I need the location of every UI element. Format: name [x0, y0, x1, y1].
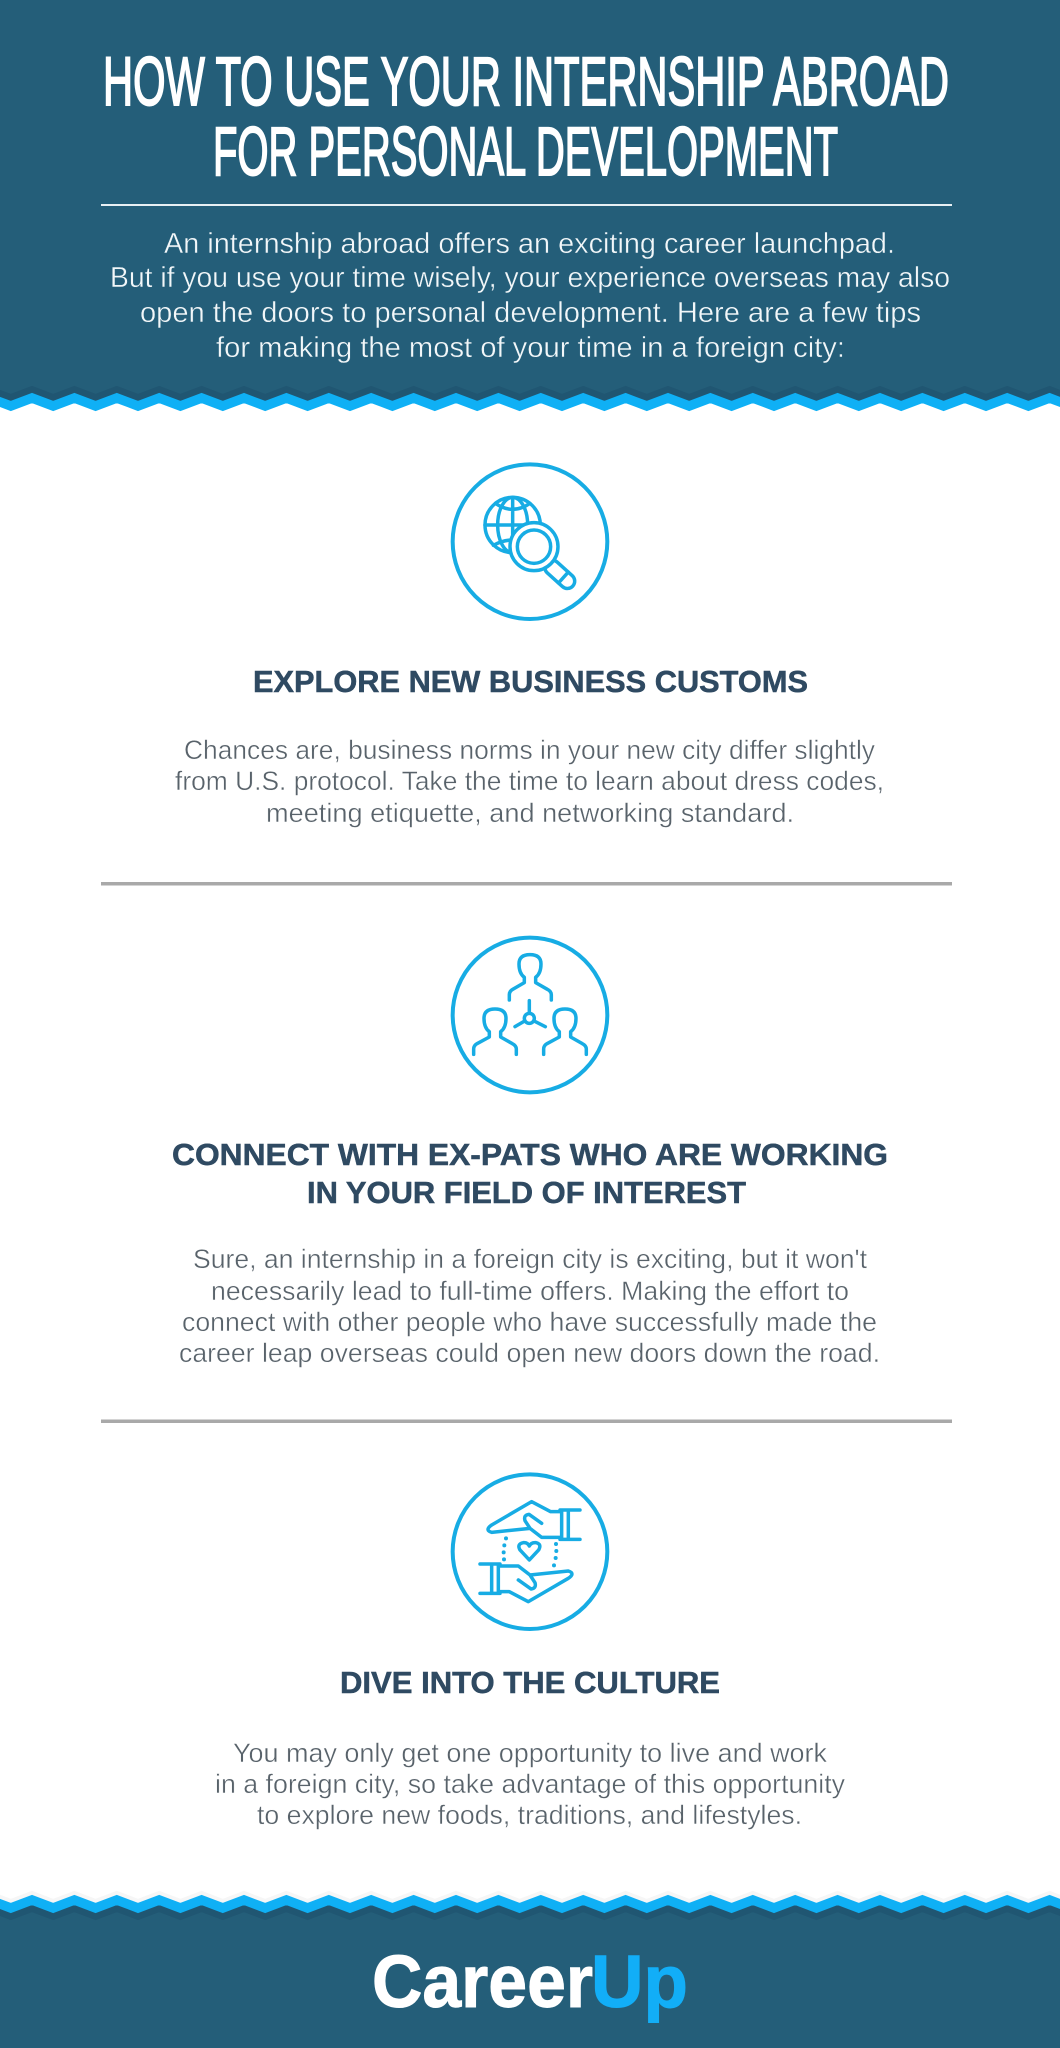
icon: three connected people: [453, 938, 607, 1092]
panel: footer banner: [0, 1894, 1060, 2048]
body text: Sure, an internship in a foreign city is exciting, but it won't: [193, 1244, 868, 1274]
logo: CareerUp: Up: [591, 1940, 688, 2023]
intro paragraph: for making the most of your time in a foreign city:: [216, 332, 845, 364]
intro paragraph: But if you use your time wisely, your experience overseas may also: [110, 262, 950, 294]
intro paragraph: [110, 228, 950, 364]
heading: CONNECT WITH EX-PATS WHO ARE WORKING: [172, 1137, 888, 1172]
body text: from U.S. protocol. Take the time to learn about dress codes,: [175, 766, 884, 796]
panel: header banner: [0, 0, 1060, 406]
panel: explore new business customs: [175, 464, 884, 828]
body text: [179, 1244, 880, 1368]
intro paragraph: An internship abroad offers an exciting career launchpad.: [164, 228, 895, 260]
icon: hands and heart: [453, 1474, 607, 1629]
body text: connect with other people who have successfully made the: [182, 1307, 877, 1337]
body text: Chances are, business norms in your new city differ slightly: [184, 735, 876, 765]
panel: dive into the culture: [215, 1474, 846, 1830]
body text: to explore new foods, traditions, and lifestyles.: [257, 1800, 802, 1830]
heading: IN YOUR FIELD OF INTEREST: [307, 1175, 746, 1210]
title: [103, 43, 949, 190]
icon: globe and magnifying glass: [453, 464, 607, 619]
logo: CareerUp: Career: [372, 1940, 593, 2023]
panel: connect with ex-pats: [172, 938, 888, 1368]
heading: EXPLORE NEW BUSINESS CUSTOMS: [253, 664, 808, 699]
body text: necessarily lead to full-time offers. Making the effort to: [211, 1276, 849, 1306]
heading: [172, 1137, 888, 1210]
body text: career leap overseas could open new doors down the road.: [179, 1338, 880, 1368]
heading: DIVE INTO THE CULTURE: [340, 1665, 720, 1700]
body text: in a foreign city, so take advantage of this opportunity: [215, 1769, 846, 1799]
body text: [175, 735, 884, 828]
body text: meeting etiquette, and networking standard.: [266, 798, 794, 828]
body text: [215, 1738, 846, 1830]
intro paragraph: open the doors to personal development. Here are a few tips: [140, 297, 921, 329]
body text: You may only get one opportunity to live and work: [233, 1738, 828, 1768]
